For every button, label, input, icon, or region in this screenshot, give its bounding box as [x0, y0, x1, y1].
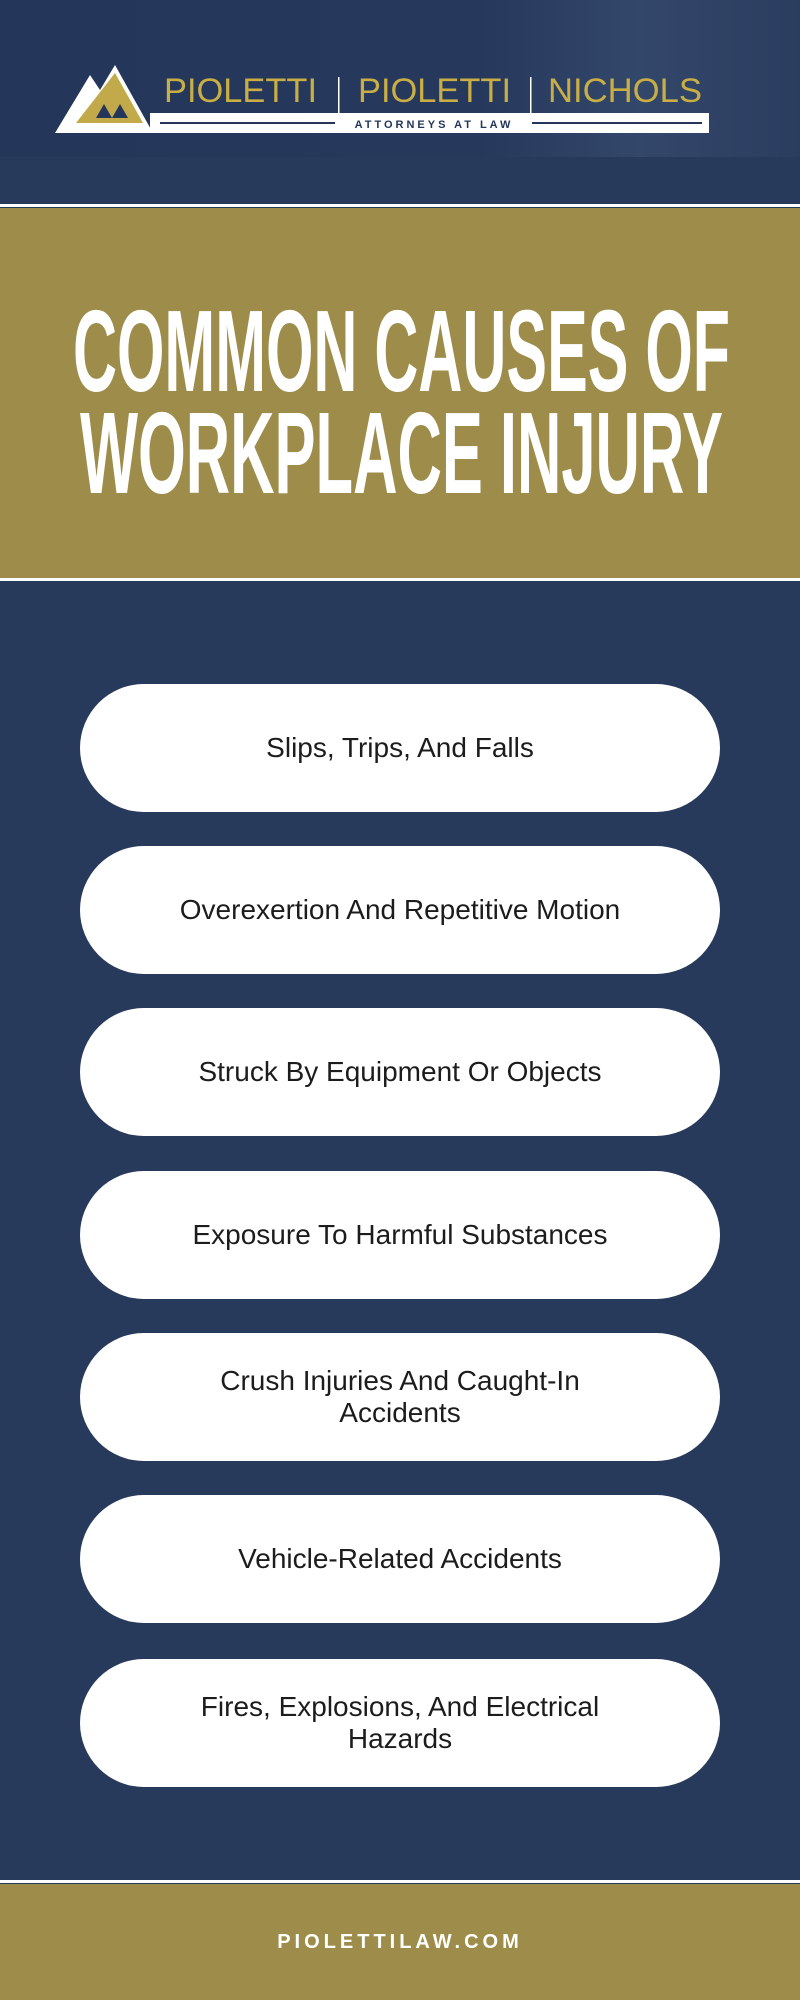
tagline bar: [150, 113, 709, 133]
item 7: [80, 1659, 720, 1787]
item 5: Crush Injuries And Caught-In Accidents: [220, 1365, 580, 1428]
item 5: [80, 1333, 720, 1461]
item 1: [80, 684, 720, 812]
item 3: [80, 1008, 720, 1136]
firm name: PIOLETTI: [358, 72, 511, 110]
item 6: Vehicle-Related Accidents: [238, 1543, 562, 1574]
title panel: [0, 208, 800, 578]
item 2: Overexertion And Repetitive Motion: [180, 894, 620, 925]
firm name: PIOLETTI: [164, 72, 317, 110]
header banner: [0, 0, 800, 157]
firm name: [164, 72, 702, 113]
logo: [55, 65, 709, 133]
item 4: Exposure To Harmful Substances: [192, 1219, 608, 1250]
list of causes: [80, 684, 720, 1787]
item 6: [80, 1495, 720, 1623]
item 4: [80, 1171, 720, 1299]
item 3: Struck By Equipment Or Objects: [198, 1056, 602, 1087]
icon: triangle mark: [55, 65, 153, 133]
firm name: NICHOLS: [548, 72, 702, 110]
footer: PIOLETTILAW.COM: [277, 1930, 523, 1952]
item 2: [80, 846, 720, 974]
tagline bar: ATTORNEYS AT LAW: [355, 119, 513, 131]
title: [73, 286, 730, 518]
item 1: Slips, Trips, And Falls: [266, 732, 534, 763]
footer: [0, 1884, 800, 2000]
item 7: Fires, Explosions, And Electrical Hazards: [201, 1691, 599, 1754]
